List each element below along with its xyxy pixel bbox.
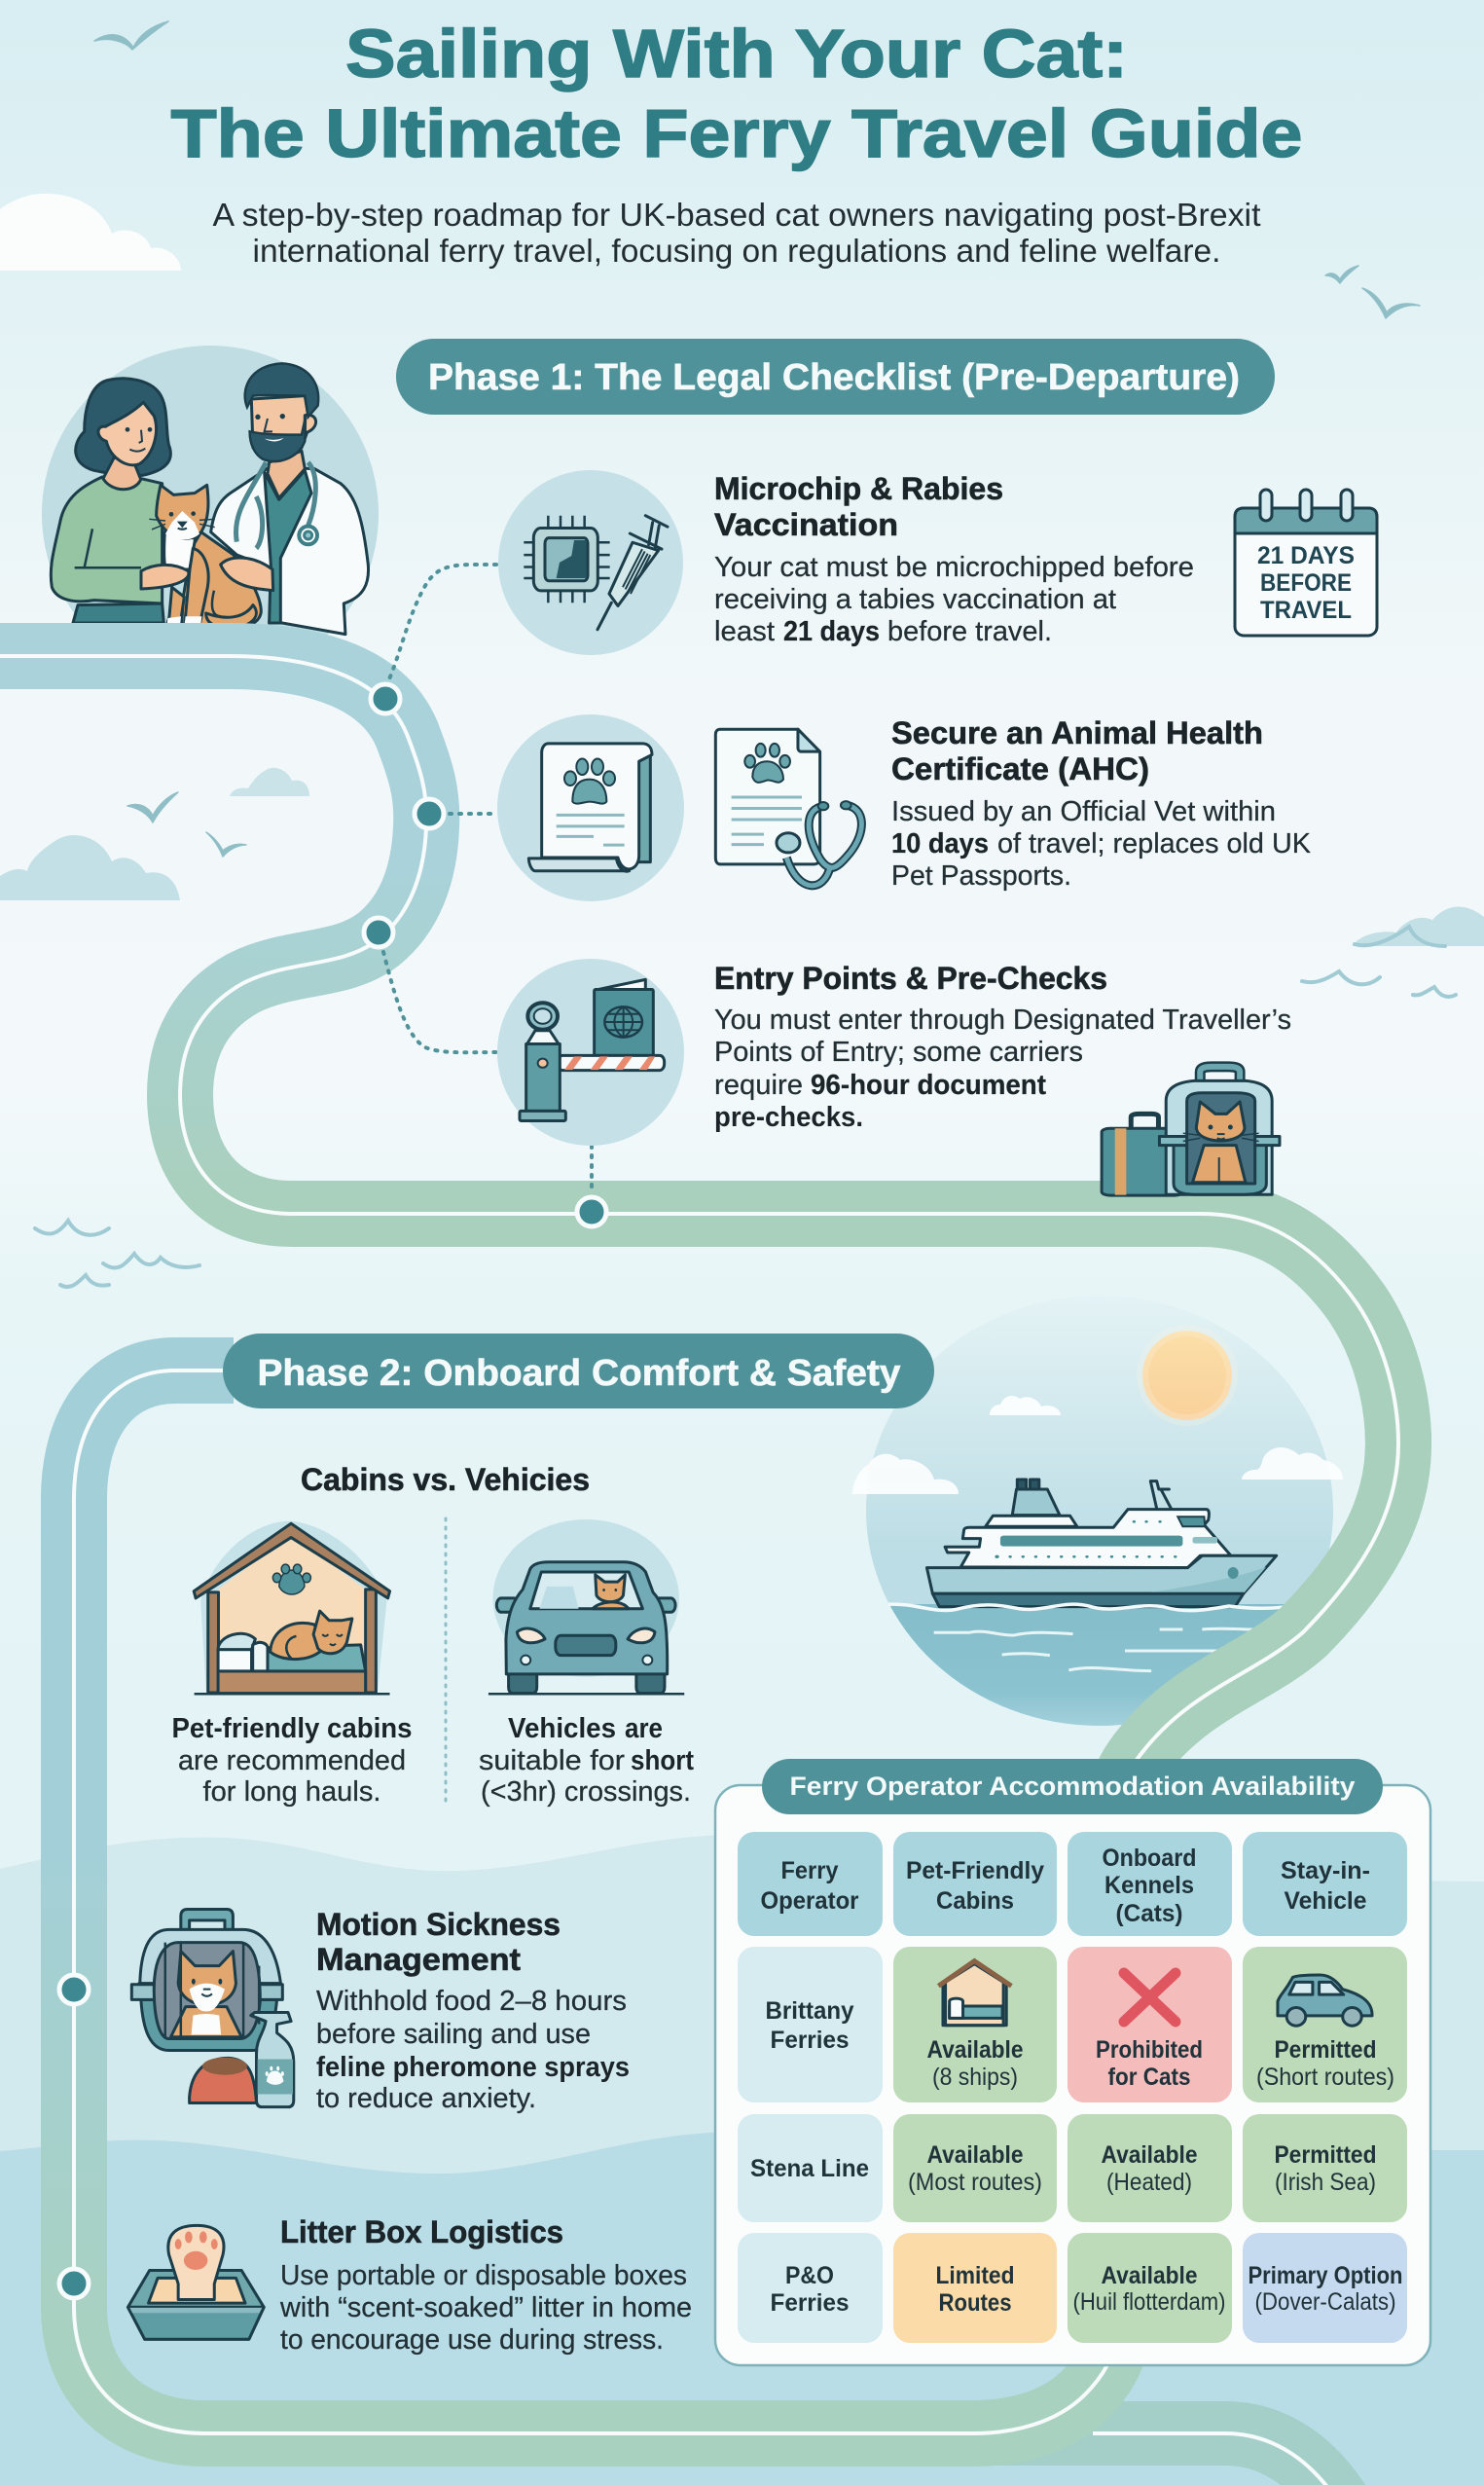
table row: Brittany Ferries: Available [926,2036,1024,2064]
table row: P&O Ferries: Available [1102,2262,1198,2289]
route nodes: phase 2 [59,1975,89,2298]
item: health certificate text: 10 days [891,828,989,859]
heading: cabins vs vehicles: Cabins vs. Vehicies [301,1462,590,1497]
title: Sailing With Your Cat: [345,16,1128,91]
route nodes [364,684,606,1226]
subtitle: international ferry travel, focusing on regulations and feline welfare. [253,233,1220,269]
birds [94,21,1420,857]
table row: P&O Ferries: (Dover-Calats) [1255,2288,1395,2316]
icon: calendar 21 days before travel [1235,490,1377,636]
item: litter box text: Litter Box Logistics [280,2214,563,2249]
vehicle caption: suitable for [479,1745,625,1776]
table header row: Kennels [1104,1872,1194,1899]
table row: Brittany Ferries: Prohibited [1096,2036,1203,2064]
icon: litter box with paw [127,2225,264,2339]
item: health certificate text: Pet Passports. [891,860,1071,892]
table row: Stena Line: Available [926,2141,1024,2169]
item: entry points icon [497,959,684,1146]
table header row: Pet-Friendly [906,1857,1044,1884]
table row: P&O Ferries: Limited [936,2262,1014,2289]
dotted connectors [383,565,592,1189]
table heading [762,1759,1383,1814]
item: entry points text: Entry Points & Pre-Checks [714,961,1107,996]
item: motion sickness text: before sailing and use [316,2019,591,2050]
item: health certificate text: Issued by an Official Vet within [891,796,1276,827]
divider [444,1518,448,1801]
ship scene [852,1325,1343,1726]
icon: carrier with spray and bowl [131,1909,294,2107]
icon: calendar 21 days before travel: 21 DAYS [1257,542,1355,569]
road: bottom right continuation [973,2433,1341,2485]
item: animal health certificate icon [497,714,684,901]
cabin caption [171,1713,413,1808]
table row: Brittany Ferries: Brittany [765,1997,854,2025]
table row: P&O Ferries: (Huil flotterdam) [1072,2288,1226,2316]
waves in sky [35,927,1456,1287]
vet [211,467,369,635]
icon: calendar 21 days before travel: BEFORE [1260,569,1352,597]
item: microchip text: 21 days [783,616,880,647]
table row: P&O Ferries: P&O [785,2262,834,2289]
title: The Ultimate Ferry Travel Guide [171,95,1302,171]
road: phase 2 route [74,1370,1119,2433]
table row: Stena Line: (Most routes) [908,2169,1042,2196]
item: motion sickness text: Motion Sickness [316,1907,561,1942]
item: motion sickness text: to reduce anxiety. [316,2083,536,2114]
icon: calendar 21 days before travel: TRAVEL [1260,597,1352,624]
icon: cat in carrier with suitcase [1102,1067,1280,1195]
icon: cabin with sleeping cat [194,1521,390,1694]
vehicle caption: are [625,1713,663,1744]
item: entry points text [714,961,1291,1133]
item: entry points text: pre-checks. [714,1102,863,1133]
item: health certificate text: of travel; replaces old UK [997,828,1312,859]
phase 1 heading [396,339,1275,415]
vehicle caption: short [631,1745,694,1776]
item: entry points text: Points of Entry; some carriers [714,1037,1083,1068]
item: microchip text: receiving a tabies vaccination at [714,584,1116,615]
table header row: Ferry [780,1857,839,1884]
table row: Stena Line [738,2114,1407,2222]
table header row: Stay-in- [1281,1857,1370,1884]
table row: P&O Ferries: Routes [938,2289,1012,2317]
table row: Brittany Ferries: Permitted [1275,2036,1376,2064]
icon: small car [1278,1975,1372,2026]
cloud: right edge [1353,906,1484,946]
item: entry points text: require [714,1070,803,1101]
phase 2 heading: Phase 2: Onboard Comfort & Safety [257,1353,901,1394]
subtitle: A step-by-step roadmap for UK-based cat owners navigating post-Brexit [212,197,1261,233]
table row: P&O Ferries: Ferries [771,2289,849,2317]
table header row: Vehicle [1285,1887,1367,1915]
cloud: small [230,768,309,796]
cloud in scene [990,1396,1061,1415]
phase 2 heading [223,1334,934,1408]
item: motion sickness text: Withhold food 2–8 hours [316,1986,627,2017]
item: litter box text: to encourage use during stress. [280,2324,664,2356]
cat [182,532,261,628]
table header row: (Cats) [1115,1900,1183,1927]
table header row [738,1832,1407,1936]
road: ship curve over scene [1119,1304,1398,1849]
icon: car with cat [489,1519,684,1694]
table row: Stena Line: Available [1102,2141,1198,2169]
icon: prohibited cross [1124,1973,1176,2022]
cabin caption: for long hauls. [202,1776,381,1808]
illustration: owner, vet and cat [42,346,379,682]
woman [76,379,170,475]
title [171,16,1302,171]
item: microchip and rabies icon [498,470,683,655]
table header row: Cabins [936,1887,1014,1915]
table heading: Ferry Operator Accommodation Availability [790,1772,1355,1801]
table row: Stena Line: (Irish Sea) [1275,2169,1376,2196]
subtitle [212,197,1261,269]
item: entry points text: You must enter through Designated Traveller’s [714,1005,1291,1036]
item: motion sickness text: Management [316,1942,521,1977]
table row: Stena Line: Permitted [1275,2141,1376,2169]
cabin caption: Pet-friendly cabins [171,1713,413,1744]
table row: Brittany Ferries: (8 ships) [932,2064,1018,2091]
item: microchip text: Vaccination [714,507,898,542]
table row: Brittany Ferries: Ferries [771,2027,849,2054]
table row: Brittany Ferries: (Short routes) [1256,2064,1394,2091]
icon: certificate with stethoscope [715,729,861,886]
road: phase 1 route [0,656,1398,2317]
hands [141,565,189,589]
table row: Brittany Ferries: for Cats [1107,2064,1191,2091]
table row: Stena Line: (Heated) [1106,2169,1192,2196]
item: microchip text [714,471,1194,647]
item: motion sickness text: feline pheromone sprays [316,2052,630,2083]
vehicle caption: (<3hr) crossings. [481,1776,691,1808]
cloud: top left [0,194,181,271]
table row: P&O Ferries: Primary Option [1248,2262,1403,2289]
table row: Stena Line: Stena Line [750,2155,869,2182]
item: motion sickness text [316,1907,630,2114]
table header row: Onboard [1102,1845,1197,1872]
item: microchip text: Your cat must be microchipped before [714,552,1194,583]
table row: Brittany Ferries [738,1947,1407,2102]
phase 1 heading: Phase 1: The Legal Checklist (Pre-Departure) [428,357,1240,398]
cabin caption: are recommended [178,1745,406,1776]
vehicle caption: Vehicles [508,1713,616,1744]
item: microchip text: before travel. [887,616,1052,647]
item: entry points text: 96-hour document [811,1070,1046,1101]
cloud: left middle [0,835,180,900]
item: health certificate text [891,715,1312,892]
item: litter box text: Use portable or disposable boxes [280,2260,687,2291]
item: litter box text [279,2214,692,2356]
vehicle caption [479,1713,694,1808]
item: microchip text: least [714,616,775,647]
icon: small cabin [938,1961,1011,2026]
table header row: Operator [761,1887,859,1915]
item: health certificate text: Certificate (AHC) [891,751,1149,786]
item: health certificate text: Secure an Animal Health [891,715,1263,750]
item: litter box text: with “scent-soaked” litter in home [279,2292,692,2323]
table row: P&O Ferries [738,2233,1407,2343]
item: microchip text: Microchip & Rabies [714,471,1003,506]
panel: ferry operator table [715,1759,1430,2365]
